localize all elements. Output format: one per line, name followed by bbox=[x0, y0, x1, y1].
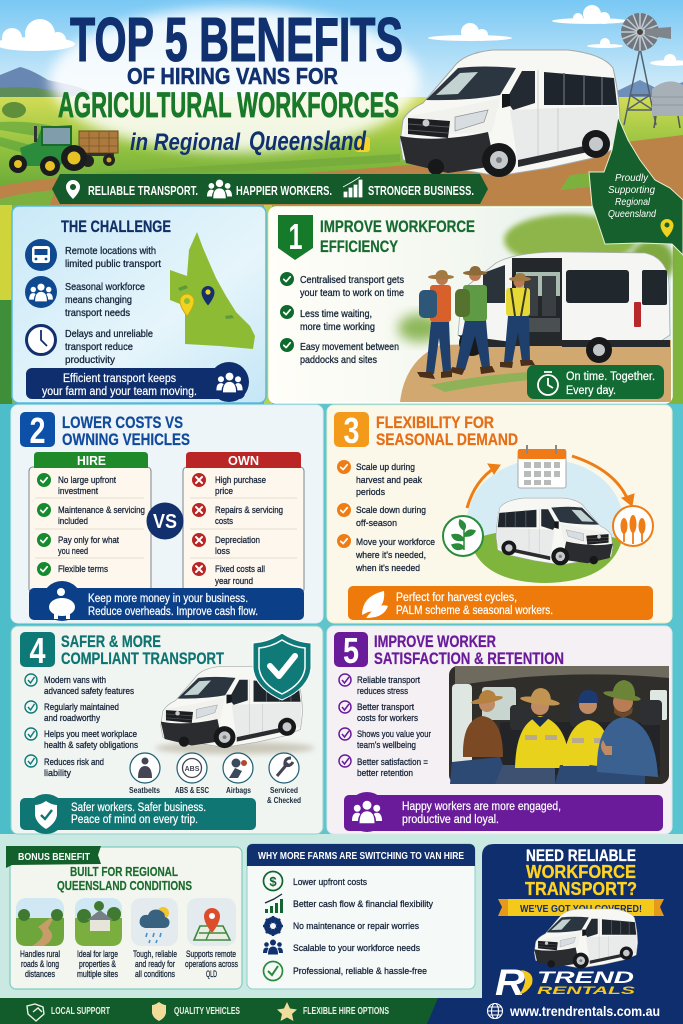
callout bar with piggy bank: Reduce overheads. Improve cash flow. bbox=[88, 606, 258, 618]
panel: why more farms are switching bbox=[247, 844, 475, 989]
number badge 5 bbox=[334, 630, 368, 671]
heading: BUILT FOR REGIONAL bbox=[70, 864, 178, 879]
heading: SAFER & MORE bbox=[61, 632, 161, 651]
benefit list: Easy movement between bbox=[300, 341, 399, 353]
icon: airbags bbox=[223, 753, 253, 795]
callout pill: On time. Together. bbox=[566, 371, 655, 383]
heading: QUEENSLAND CONDITIONS bbox=[57, 878, 192, 893]
worker: yellow hi-vis shirt with hat bbox=[495, 688, 570, 784]
logo: trend rentals: TREND bbox=[537, 968, 634, 987]
heading: SATISFACTION & RETENTION bbox=[374, 649, 564, 668]
number badge 2: 2 bbox=[30, 410, 46, 451]
farm fields bbox=[0, 97, 683, 205]
hire column: Flexible terms bbox=[58, 564, 108, 575]
own column: year round bbox=[215, 576, 253, 587]
tile: large property: properties & bbox=[79, 959, 116, 970]
icon: team: Scalable to your workforce needs bbox=[293, 943, 420, 954]
benefit list: your team to work on time bbox=[300, 287, 404, 299]
panel: improve workforce efficiency bbox=[269, 207, 674, 403]
icon: airbags: Airbags bbox=[226, 785, 251, 795]
panel: safer and more compliant bbox=[11, 626, 323, 834]
challenge list: Remote locations with bbox=[65, 245, 156, 257]
icon: gear: No maintenance or repair worries bbox=[293, 921, 419, 932]
vs badge: VS bbox=[153, 511, 177, 533]
own column: Fixed costs all bbox=[215, 564, 265, 575]
own column: Repairs & servicing bbox=[215, 505, 283, 516]
worker: denim shirt with green hat bbox=[566, 680, 658, 784]
tractor and trailer bbox=[9, 125, 118, 176]
retention text: better retention bbox=[357, 768, 413, 779]
icon: gear bbox=[263, 916, 419, 936]
heading: SEASONAL DEMAND bbox=[376, 430, 518, 449]
icon: seatbelts: Seatbelts bbox=[129, 785, 160, 795]
benefit list: harvest and peak bbox=[356, 475, 422, 486]
benefit list: Centralised transport gets bbox=[300, 274, 404, 286]
benefit list: paddocks and sites bbox=[300, 354, 377, 366]
icon: location pin bbox=[66, 180, 80, 199]
own column: Depreciation bbox=[215, 535, 260, 546]
heading bbox=[374, 632, 564, 668]
tile: large property: multiple sites bbox=[77, 969, 118, 980]
icon: dollar: $ bbox=[269, 874, 277, 889]
panel: worker satisfaction and retention bbox=[327, 626, 672, 834]
tile: weather: and ready for bbox=[135, 959, 175, 970]
hero van bbox=[400, 50, 620, 177]
title: AGRICULTURAL WORKFORCES bbox=[58, 86, 399, 125]
icon: star bbox=[277, 1002, 297, 1021]
benefit list: Scale up during bbox=[356, 462, 415, 473]
logo: trend rentals: R bbox=[495, 962, 525, 1003]
icon: chart bbox=[265, 894, 433, 913]
safety text bbox=[44, 675, 138, 779]
queensland map badge: Proudly bbox=[615, 173, 649, 184]
scenery bbox=[398, 214, 674, 402]
hills bbox=[0, 67, 100, 98]
number badge 3 bbox=[334, 410, 369, 451]
icon: clock bbox=[26, 326, 56, 354]
hire column bbox=[29, 452, 151, 593]
clouds bbox=[0, 5, 683, 66]
heading: COMPLIANT TRANSPORT bbox=[61, 649, 224, 668]
queensland map badge: Queensland bbox=[608, 209, 656, 220]
retention text: Better satisfaction = bbox=[357, 757, 428, 768]
seasonal cycle illustration bbox=[443, 445, 653, 583]
tile: map pin: Supports remote bbox=[186, 949, 236, 960]
callout pill bbox=[527, 365, 664, 399]
icon: serviced and checked bbox=[267, 753, 301, 805]
tile: weather: all conditions bbox=[135, 969, 175, 980]
van interior illustration bbox=[449, 666, 669, 784]
tile: weather: Tough, reliable bbox=[133, 949, 177, 960]
own column: costs bbox=[215, 516, 233, 527]
tile: map pin bbox=[185, 898, 238, 980]
panel: call to action bbox=[482, 844, 683, 1003]
retention text: Reliable transport bbox=[357, 675, 420, 686]
icon: team bbox=[263, 940, 420, 954]
heading: THE CHALLENGE bbox=[61, 217, 171, 236]
callout bar: Happy workers are more engaged, bbox=[402, 801, 561, 813]
worker three bbox=[500, 273, 535, 368]
benefit list: periods bbox=[356, 487, 385, 498]
title glow bbox=[50, 8, 420, 152]
hire column: included bbox=[58, 516, 88, 527]
logo: trend rentals: RENTALS bbox=[537, 985, 636, 997]
benefit list: more time working bbox=[300, 321, 375, 333]
icon: abs: ABS bbox=[185, 766, 200, 773]
icon: wheat bbox=[613, 506, 653, 546]
icon: check bbox=[264, 962, 427, 980]
safety text: Reduces risk and bbox=[44, 757, 104, 768]
hire column: HIRE bbox=[77, 453, 106, 468]
safety list bbox=[25, 674, 37, 767]
panel: lower costs vs owning bbox=[11, 405, 323, 623]
flexible hire: FLEXIBLE HIRE OPTIONS bbox=[303, 1006, 389, 1017]
icon: abs bbox=[175, 753, 209, 795]
safety text: Modern vans with bbox=[44, 675, 106, 686]
title: OF HIRING VANS FOR bbox=[127, 63, 338, 89]
callout pill: Every day. bbox=[566, 385, 616, 397]
tile: rural road bbox=[16, 898, 64, 980]
safety text: liability bbox=[44, 768, 71, 779]
number badge 3: 3 bbox=[344, 410, 360, 451]
retention list bbox=[339, 674, 351, 767]
benefit list: Scale down during bbox=[356, 505, 426, 516]
challenge list: means changing bbox=[65, 294, 132, 306]
bonus tag bbox=[6, 846, 101, 868]
icon: seatbelts bbox=[129, 753, 160, 795]
heading: TRANSPORT? bbox=[525, 879, 637, 899]
title: TOP 5 BENEFITS bbox=[70, 6, 403, 75]
retention text: costs for workers bbox=[357, 713, 418, 724]
heading bbox=[57, 864, 192, 893]
header illustration bbox=[0, 0, 683, 205]
tile: weather bbox=[131, 898, 178, 980]
retention text: team's wellbeing bbox=[357, 740, 416, 751]
challenge list bbox=[65, 245, 161, 366]
logo: trend rentals bbox=[495, 962, 636, 1003]
icon: globe bbox=[488, 1004, 502, 1018]
hire column: you need bbox=[58, 546, 88, 557]
vs badge bbox=[146, 502, 184, 540]
icon: dollar: Lower upfront costs bbox=[293, 877, 367, 888]
hire column: investment bbox=[58, 486, 98, 497]
number badge 5: 5 bbox=[343, 630, 359, 671]
yellow banner: WE'VE GOT YOU COVERED! bbox=[520, 903, 642, 915]
yellow banner bbox=[498, 899, 664, 916]
callout bar with piggy bank bbox=[29, 581, 304, 621]
own column: price bbox=[215, 486, 233, 497]
heading: WORKFORCE bbox=[526, 862, 636, 882]
icon: workers bbox=[207, 180, 232, 198]
icon: calendar bbox=[518, 445, 566, 488]
cycle arrows bbox=[467, 456, 634, 508]
van with open door bbox=[458, 252, 670, 363]
heading: LOWER COSTS VS bbox=[62, 413, 183, 432]
heading bbox=[320, 217, 475, 256]
safety text: health & safety obligations bbox=[44, 740, 138, 751]
worker two bbox=[450, 266, 495, 375]
worker: yellow hi-vis shirt with navy cap bbox=[555, 690, 612, 784]
heading bbox=[376, 413, 518, 449]
tagline ribbon: RELIABLE TRANSPORT. bbox=[88, 183, 198, 198]
title: Queensland bbox=[249, 126, 366, 156]
callout bar: productive and loyal. bbox=[402, 814, 499, 826]
icon: serviced and checked: & Checked bbox=[267, 795, 301, 805]
footer bar bbox=[0, 998, 683, 1024]
callout bar with piggy bank: Keep more money in your business. bbox=[88, 593, 248, 605]
queensland map badge bbox=[589, 117, 683, 255]
callout bar: PALM scheme & seasonal workers. bbox=[396, 605, 553, 617]
benefit list: Less time waiting, bbox=[300, 308, 372, 320]
windmill and silo bbox=[621, 13, 683, 128]
challenge list: Seasonal workforce bbox=[65, 281, 145, 293]
icon: workforce bbox=[25, 276, 57, 308]
tagline ribbon bbox=[52, 174, 488, 204]
safety text: and roadworthy bbox=[44, 713, 100, 724]
heading: FLEXIBILITY FOR bbox=[376, 413, 494, 432]
number badge 1 bbox=[278, 215, 313, 260]
own column: loss bbox=[215, 546, 230, 557]
retention text: Better transport bbox=[357, 702, 414, 713]
title bbox=[58, 6, 403, 156]
heading: IMPROVE WORKFORCE bbox=[320, 217, 475, 236]
panel header bbox=[247, 844, 475, 866]
icon: dollar bbox=[264, 872, 367, 890]
tagline ribbon: STRONGER BUSINESS. bbox=[368, 183, 474, 198]
callout bar: Efficient transport keeps bbox=[63, 373, 176, 385]
panel: bonus benefit bbox=[6, 846, 242, 989]
van bbox=[155, 666, 315, 754]
bonus tag: BONUS BENEFIT bbox=[18, 851, 90, 863]
callout bar: your farm and your team moving. bbox=[42, 386, 197, 398]
benefit list: off-season bbox=[356, 518, 397, 529]
callout bar bbox=[344, 792, 663, 832]
local support: LOCAL SUPPORT bbox=[51, 1006, 110, 1017]
retention text: reduces stress bbox=[357, 686, 408, 697]
shield bbox=[253, 633, 311, 700]
heading: IMPROVE WORKER bbox=[374, 632, 496, 651]
tile: map pin: operations across bbox=[185, 959, 238, 970]
safety text: Helps you meet workplace bbox=[44, 729, 137, 740]
number badge 1: 1 bbox=[288, 216, 302, 257]
tile: rural road: roads & long bbox=[21, 959, 59, 970]
workers walking bbox=[417, 266, 535, 379]
icon: abs: ABS & ESC bbox=[175, 785, 209, 795]
number badge 4: 4 bbox=[30, 630, 46, 671]
tile: rural road: Handles rural bbox=[20, 949, 60, 960]
icon: seedling bbox=[443, 516, 483, 556]
queensland map badge: Regional bbox=[615, 197, 651, 208]
icon: growth chart bbox=[343, 177, 362, 197]
callout bar bbox=[20, 794, 256, 834]
own column: High purchase bbox=[215, 475, 266, 486]
retention text bbox=[357, 675, 431, 779]
heading: EFFICIENCY bbox=[320, 237, 399, 256]
heading bbox=[525, 846, 637, 899]
heading: NEED RELIABLE bbox=[526, 846, 636, 865]
worker one bbox=[417, 270, 454, 379]
benefit list: when it's needed bbox=[355, 563, 420, 574]
hire column: No large upfront bbox=[58, 475, 116, 486]
heading bbox=[62, 413, 190, 449]
queensland map bbox=[170, 232, 255, 349]
benefit list bbox=[337, 460, 435, 574]
benefit list: Move your workforce bbox=[356, 537, 435, 548]
retention text: Shows you value your bbox=[357, 729, 431, 740]
challenge list: productivity bbox=[65, 354, 116, 366]
icon: bus bbox=[25, 239, 57, 271]
callout bar: Perfect for harvest cycles, bbox=[396, 592, 517, 604]
website: www.trendrentals.com.au bbox=[509, 1003, 660, 1019]
van bbox=[534, 909, 638, 969]
own column bbox=[183, 452, 304, 593]
tile: rural road: distances bbox=[25, 969, 55, 980]
icon: quality shield bbox=[152, 1002, 166, 1021]
number badge 2 bbox=[20, 410, 55, 451]
quality vehicles: QUALITY VEHICLES bbox=[174, 1006, 240, 1017]
callout bar: Safer workers. Safer business. bbox=[71, 802, 206, 814]
safety text: advanced safety features bbox=[44, 686, 134, 697]
challenge list: transport needs bbox=[65, 307, 130, 319]
tile: large property bbox=[75, 898, 122, 980]
title: in Regional bbox=[130, 129, 241, 156]
challenge list: transport reduce bbox=[65, 341, 133, 353]
number badge 4 bbox=[20, 630, 55, 671]
panel header: WHY MORE FARMS ARE SWITCHING TO VAN HIRE bbox=[258, 850, 464, 862]
icon: check: Professional, reliable & hassle-free bbox=[293, 966, 427, 977]
callout bar bbox=[26, 362, 249, 402]
queensland map badge: Supporting bbox=[608, 185, 655, 196]
icon: chart: Better cash flow & financial flexibility bbox=[293, 899, 433, 910]
tile: map pin: QLD bbox=[206, 969, 217, 980]
own column: OWN bbox=[228, 453, 259, 468]
icon: handshake bbox=[27, 1004, 44, 1021]
tile: large property: Ideal for large bbox=[77, 949, 118, 960]
heading bbox=[61, 632, 224, 668]
hire column: Pay only for what bbox=[58, 535, 119, 546]
callout bar: Peace of mind on every trip. bbox=[71, 814, 198, 826]
worker: woman in brown shirt bbox=[450, 690, 510, 784]
dirt road bbox=[0, 135, 683, 205]
heading: OWNING VEHICLES bbox=[62, 430, 190, 449]
panel: flexibility for seasonal demand bbox=[327, 405, 672, 623]
benefit list bbox=[280, 272, 404, 366]
safety text: Regularly maintained bbox=[44, 702, 119, 713]
benefit list: where it's needed, bbox=[355, 550, 426, 561]
callout bar bbox=[348, 586, 653, 620]
van bbox=[496, 498, 613, 565]
panel: the challenge bbox=[12, 206, 266, 403]
challenge list: Delays and unreliable bbox=[65, 328, 153, 340]
tagline ribbon: HAPPIER WORKERS. bbox=[236, 183, 332, 198]
hire column: Maintenance & servicing bbox=[58, 505, 145, 516]
icon: serviced and checked: Serviced bbox=[270, 785, 298, 795]
challenge list: limited public transport bbox=[65, 258, 161, 270]
